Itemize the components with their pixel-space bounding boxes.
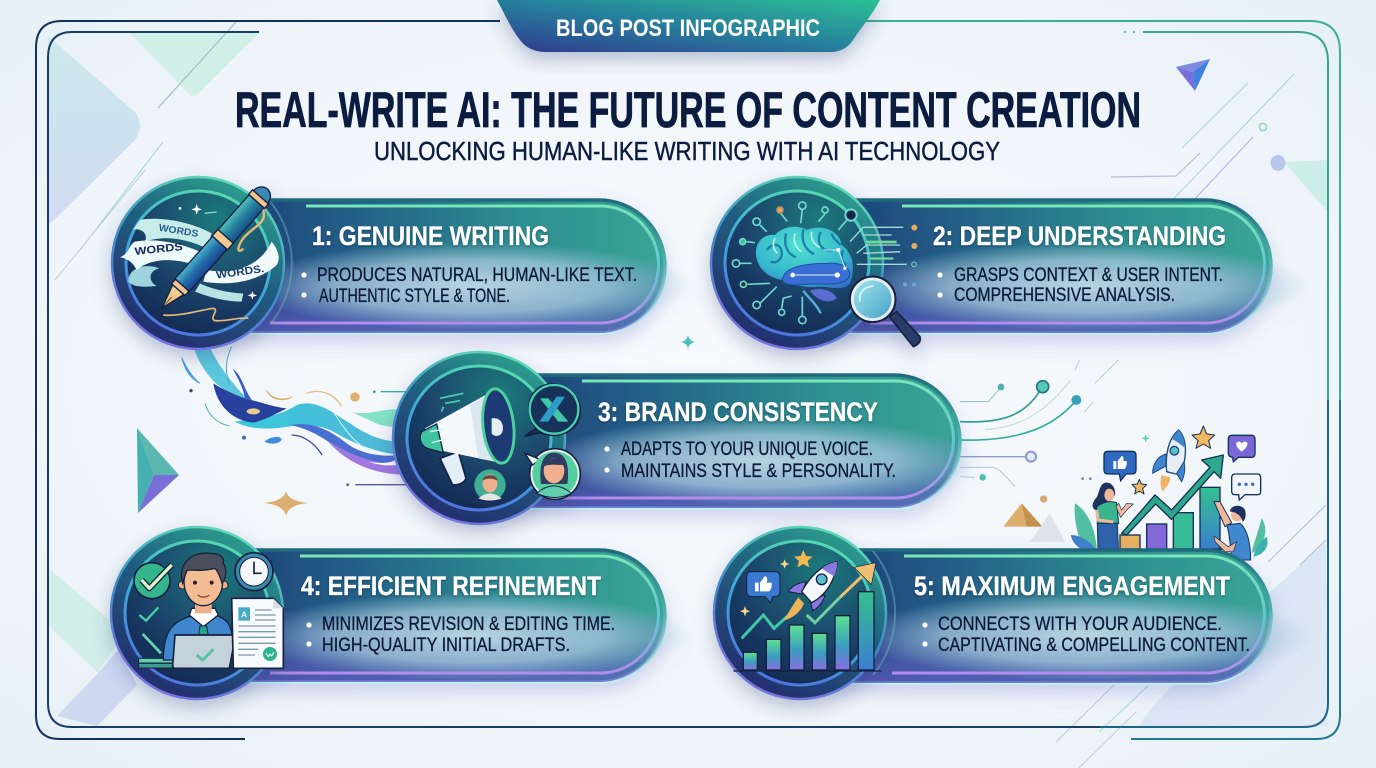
panel 5 bullet list: CAPTIVATING & COMPELLING CONTENT. — [938, 635, 1250, 656]
panel 4 bullet list: MINIMIZES REVISION & EDITING TIME. — [322, 614, 615, 635]
subtitle: UNLOCKING HUMAN-LIKE WRITING WITH AI TECHNOLOGY — [374, 136, 1000, 166]
icon: brain with magnifier — [711, 177, 920, 349]
header tab — [497, 0, 880, 52]
panel 1: genuine writing — [112, 177, 695, 349]
panel 1 bullet list: AUTHENTIC STYLE & TONE. — [319, 286, 510, 307]
panel 3 bullet list: ADAPTS TO YOUR UNIQUE VOICE. — [621, 439, 873, 460]
panel 4 heading: 4: EFFICIENT REFINEMENT — [301, 571, 601, 601]
panel 2 bullet list: COMPREHENSIVE ANALYSIS. — [954, 285, 1175, 306]
panel 2 bullet list: GRASPS CONTEXT & USER INTENT. — [954, 265, 1223, 286]
panel 4 pill — [190, 550, 695, 682]
panel 2 heading: 2: DEEP UNDERSTANDING — [933, 221, 1226, 251]
circuit lines right of panel 3 — [960, 360, 1118, 487]
decorative sparkle — [681, 335, 695, 349]
panel 2: deep understanding — [711, 177, 1310, 349]
panel 5 pill — [790, 550, 1315, 683]
panel 4 bullet list — [306, 614, 615, 656]
icon: gold star — [264, 491, 308, 516]
icon: fountain pen and words — [112, 177, 284, 349]
panel 1 bullet list — [301, 265, 637, 307]
tab label: BLOG POST INFOGRAPHIC — [556, 15, 820, 42]
panel 1 heading: 1: GENUINE WRITING — [312, 221, 549, 251]
icon: fountain pen and words: WORDS — [134, 241, 183, 258]
paint flow illustration — [182, 340, 413, 486]
icon: fountain pen and words: WORDS. — [215, 263, 265, 282]
icon: writer with laptop, clock and document — [111, 527, 283, 699]
panel 2 bullet list — [937, 265, 1223, 306]
icon: fountain pen and words: WORDS — [158, 223, 200, 240]
woman figure — [1093, 483, 1133, 549]
panel 5 bullet list: CONNECTS WITH YOUR AUDIENCE. — [938, 614, 1222, 635]
icon: writer with laptop, clock and document: A — [241, 610, 248, 620]
panel 3 heading: 3: BRAND CONSISTENCY — [598, 397, 878, 427]
panel 2 pill — [790, 200, 1310, 333]
panel 3 pill — [470, 375, 980, 508]
panel 4: efficient refinement — [111, 527, 695, 699]
icon: rocket and rising chart — [714, 527, 886, 699]
panel 4 bullet list: HIGH-QUALITY INITIAL DRAFTS. — [322, 635, 570, 656]
panel 5 heading: 5: MAXIMUM ENGAGEMENT — [914, 571, 1230, 601]
growth illustration: team, rocket, chart — [1003, 426, 1268, 560]
panel 3 bullet list — [604, 439, 896, 482]
panel 1 bullet list: PRODUCES NATURAL, HUMAN-LIKE TEXT. — [317, 265, 637, 286]
man figure — [1214, 502, 1251, 560]
panel 3: brand consistency — [393, 352, 980, 524]
icon: megaphone with speech bubbles — [393, 352, 580, 524]
icon: triangle left — [137, 428, 179, 513]
panel 1 pill — [190, 200, 695, 333]
panel 5: maximum engagement — [714, 527, 1315, 699]
panel 3 bullet list: MAINTAINS STYLE & PERSONALITY. — [621, 461, 896, 482]
panel 5 bullet list — [922, 614, 1250, 656]
icon: paper plane — [1176, 59, 1210, 91]
